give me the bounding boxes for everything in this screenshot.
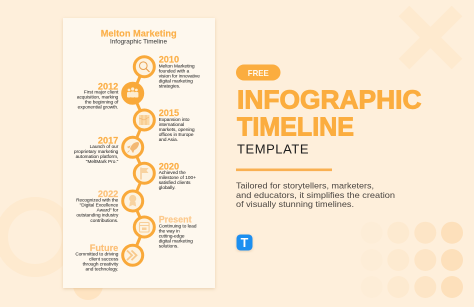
node: present calendar: [134, 217, 154, 237]
entry: 2022: outstanding industry: [76, 213, 119, 218]
heading: infographic timeline: TIMELINE: [237, 111, 354, 141]
divider line: [236, 168, 332, 171]
node: 2020 flag: [134, 163, 154, 183]
entry: present: [159, 215, 197, 249]
entry: future: [75, 243, 119, 272]
entry: 2020: [159, 161, 196, 190]
entry: present: Continuing to lead: [159, 223, 197, 228]
decorative ring: [2, 204, 68, 270]
entry: 2010: vision for innovative: [159, 73, 200, 78]
card title: Melton Marketing: [101, 28, 177, 38]
entry: 2017: [74, 135, 119, 164]
entry: 2022: Recognized with the: [76, 198, 119, 203]
heading: infographic timeline: INFOGRAPHIC: [237, 84, 422, 114]
entry: 2020: milestone of 100+: [159, 175, 196, 180]
badge: free: FREE: [248, 68, 269, 78]
entry: 2012: acquisition, marking: [77, 94, 119, 99]
entry: 2015: 2015: [159, 108, 179, 118]
node: 2010 magnifier: [134, 57, 154, 77]
heading: infographic timeline: [237, 84, 422, 141]
entry: 2012: [77, 81, 119, 110]
description text: of visually stunning timelines.: [236, 200, 354, 209]
node: 2017 rocket: [123, 137, 143, 157]
description text: [236, 181, 395, 209]
description text: Tailored for storytellers, marketers,: [236, 181, 374, 190]
icon: template logo: [236, 234, 252, 250]
card subtitle: Infographic Timeline: [110, 40, 168, 46]
entry: 2017: automation platform,: [76, 154, 118, 159]
entry: 2010: Melton Marketing: [159, 63, 195, 68]
entry: 2017: proprietary marketing: [74, 149, 119, 154]
entry: 2010: founded with a: [159, 68, 190, 73]
entry: 2012: First major client: [84, 89, 119, 94]
entry: 2015: international: [159, 122, 184, 127]
entry: future: client success: [89, 257, 119, 262]
entry: future: and technology.: [86, 267, 118, 272]
description text: and educators, it simplifies the creation: [236, 191, 395, 200]
entry: 2017: 2017: [98, 135, 118, 145]
entry: future: Future: [90, 243, 118, 253]
entry: present: cutting-edge: [159, 234, 185, 239]
entry: 2015: [159, 108, 195, 142]
entry: 2020: Achieved the: [159, 170, 186, 175]
entry: 2022: contributions.: [90, 218, 118, 223]
panel: timeline card: [63, 18, 215, 288]
entry: 2020: globally.: [159, 185, 176, 190]
entry: 2020: satisfied clients: [159, 180, 191, 185]
entry: present: Present: [159, 215, 192, 225]
icon: template logo: T: [241, 236, 249, 250]
decorative circle below card: [73, 270, 103, 300]
entry: 2022: Award" for: [97, 208, 119, 213]
entry: 2015: Expansion into: [159, 117, 190, 122]
node: 2012 team: [123, 83, 143, 103]
entry: 2022: "Digital Excellence: [80, 203, 119, 208]
entry: 2010: 2010: [159, 54, 179, 64]
entry: 2012: exponential growth.: [78, 104, 118, 110]
entry: present: solutions.: [159, 244, 179, 249]
entry: 2015: offices in Europe: [159, 132, 194, 137]
badge: free: [236, 64, 280, 80]
node: 2015 map: [134, 110, 154, 130]
entry: 2015: markets, opening: [159, 127, 195, 132]
decorative dot grid: [361, 222, 463, 298]
entry: 2022: 2022: [98, 189, 118, 199]
entry: future: through creativity: [83, 262, 119, 267]
node: future arrows: [123, 245, 143, 265]
entry: 2017: Launch of our: [90, 144, 119, 149]
entry: 2010: digital marketing: [159, 78, 193, 83]
node: 2022 award: [123, 191, 143, 211]
subheading: template: TEMPLATE: [237, 142, 309, 156]
entry: 2017: "MeltMark Pro.": [86, 159, 119, 164]
entry: future: Committed to driving: [75, 252, 119, 257]
entry: 2012: 2012: [98, 81, 118, 91]
entry: 2022: [76, 189, 119, 223]
entry: 2010: [159, 54, 200, 88]
entry: 2010: strategies.: [159, 83, 180, 88]
entry: present: the way in: [159, 228, 180, 233]
timeline connector: [133, 67, 144, 255]
entry: 2012: the beginning of: [85, 99, 119, 104]
entry: 2015: and Asia.: [159, 137, 178, 142]
decorative cross: [404, 11, 457, 64]
entry: 2020: 2020: [159, 161, 179, 171]
entry: present: digital marketing: [159, 239, 193, 244]
